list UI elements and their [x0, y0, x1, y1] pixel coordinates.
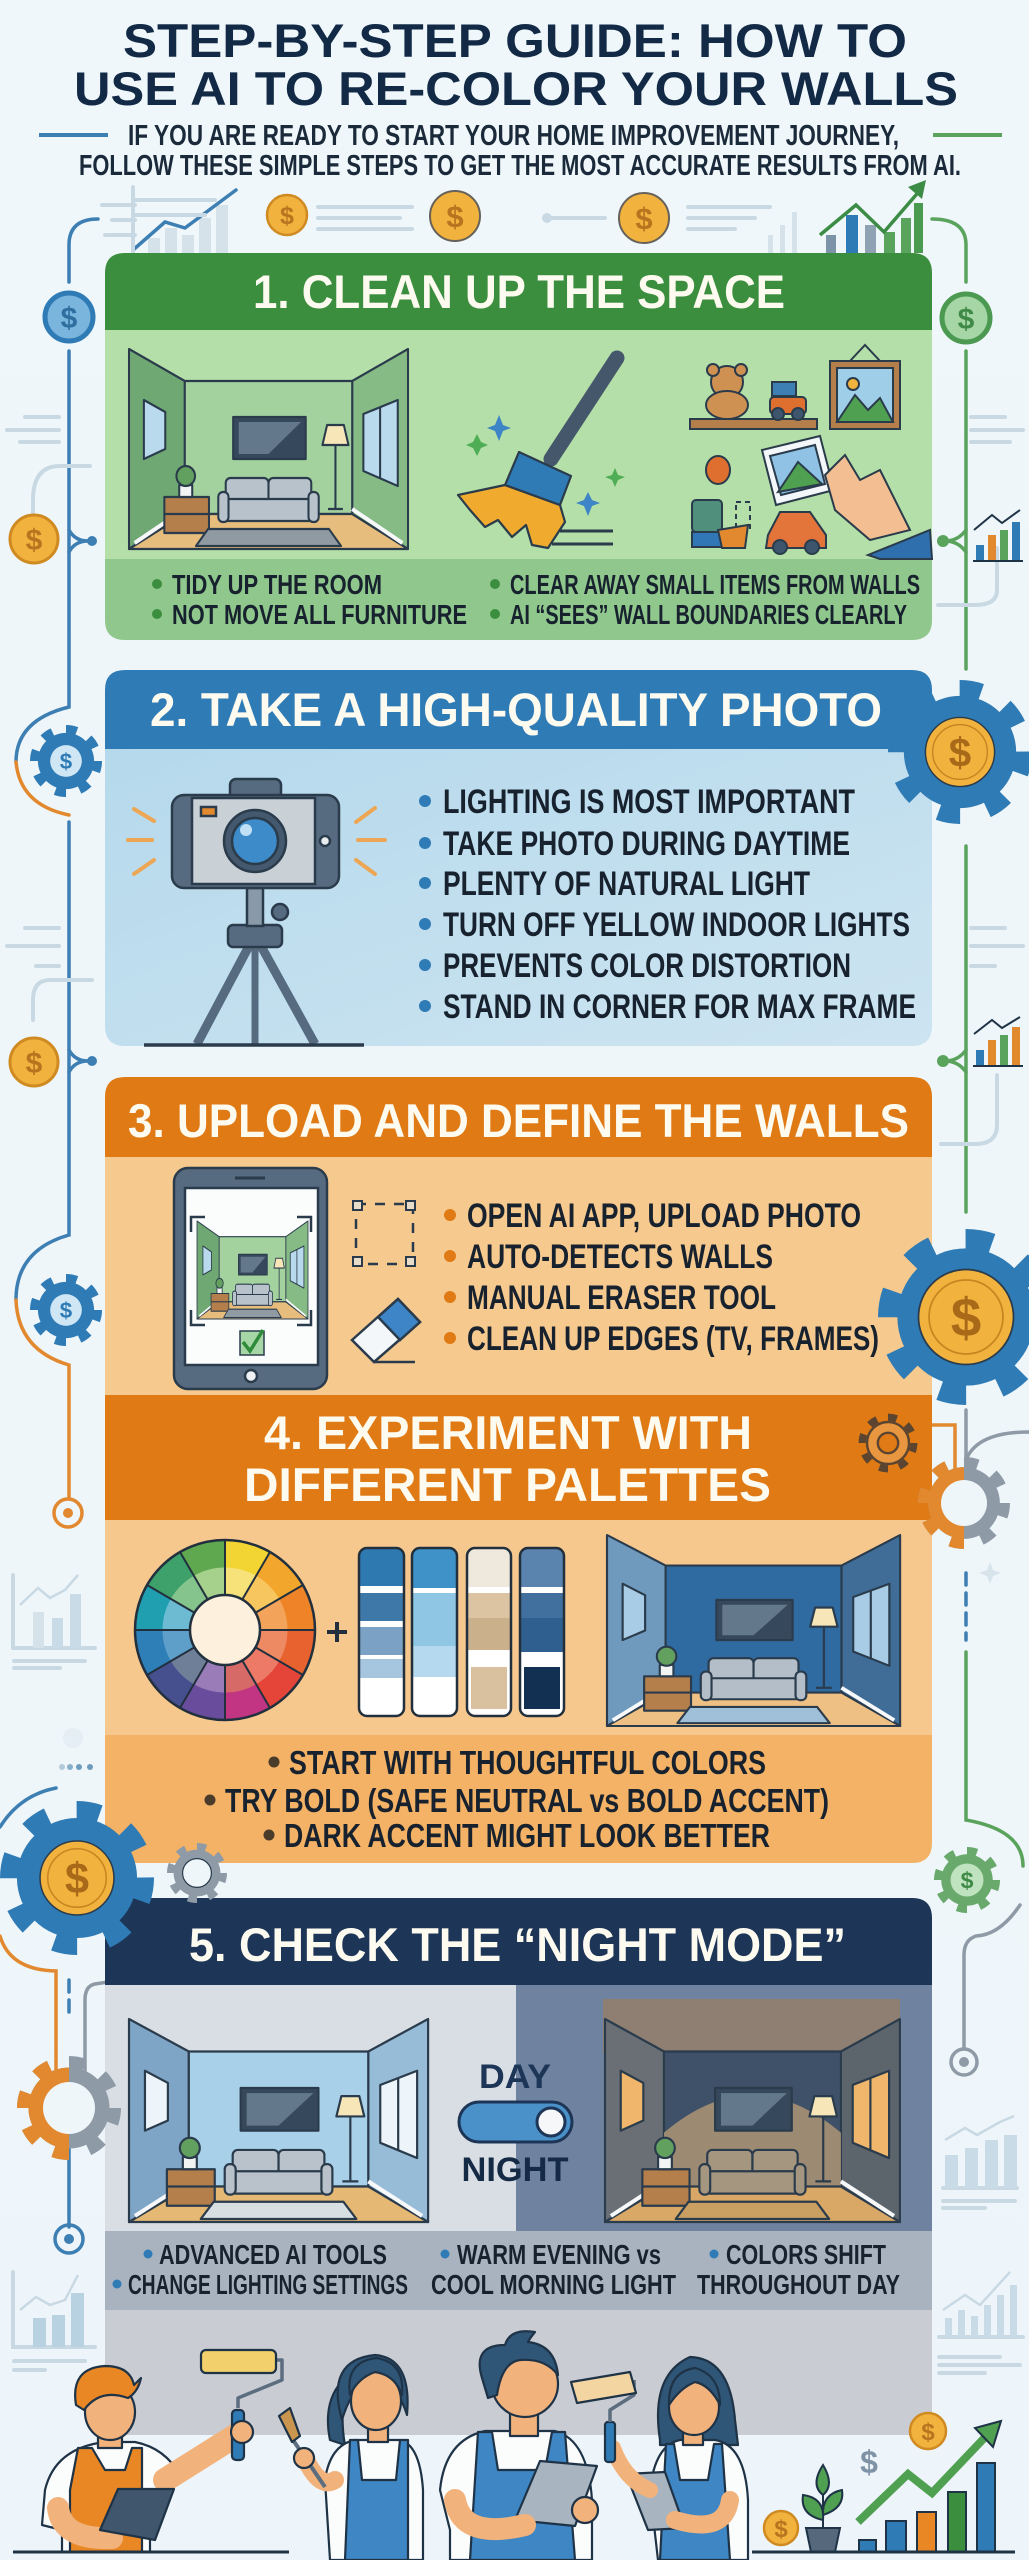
sparkles — [466, 415, 625, 516]
bullet list: TRY BOLD (SAFE NEUTRAL vs BOLD ACCENT) — [225, 1782, 829, 1819]
panel: step 2 take a high-quality photo — [105, 670, 932, 1046]
gear: big blue left with coin: $ — [65, 1855, 89, 1903]
gear: green right: $ — [961, 1867, 974, 1893]
illustration: painter with ponytail — [279, 2355, 423, 2560]
gear: panel 3 right — [890, 1241, 1029, 1393]
title: STEP-BY-STEP GUIDE: HOW TO — [123, 14, 907, 67]
mini chart right 1 — [973, 510, 1023, 561]
illustration: painter with tablet — [440, 2331, 598, 2560]
illustration: plant and growth chart — [13, 2421, 1015, 2552]
gear: step 3 left — [35, 1279, 97, 1341]
toggle: day night: NIGHT — [462, 2151, 569, 2189]
coins row: $ — [446, 199, 464, 234]
heading: 4. EXPERIMENT WITH — [264, 1406, 752, 1459]
coin: left 1 — [10, 515, 58, 563]
gear: green right — [939, 1852, 995, 1908]
heading: 5. CHECK THE “NIGHT MODE” — [189, 1918, 846, 1971]
swatch strips — [359, 1548, 564, 1716]
coin: top of chart: $ — [921, 2419, 935, 2446]
bullet list: THROUGHOUT DAY — [697, 2269, 900, 2300]
coin: blue left: $ — [61, 302, 78, 335]
chart: colour wheel — [121, 1526, 329, 1734]
coin: left 2: $ — [26, 1047, 43, 1080]
illustration: camera on tripod — [144, 779, 364, 1045]
bullet list: PREVENTS COLOR DISTORTION — [443, 947, 851, 985]
heading: DIFFERENT PALETTES — [244, 1458, 771, 1511]
bullet list: AUTO-DETECTS WALLS — [467, 1238, 773, 1276]
bullet list: START WITH THOUGHTFUL COLORS — [289, 1744, 766, 1781]
mini chart right 2 — [973, 1017, 1023, 1066]
illustration: painter with orange hat — [42, 2350, 282, 2552]
icon: small gear — [862, 1417, 914, 1469]
bullet list: NOT MOVE ALL FURNITURE — [172, 599, 467, 630]
bullet list: CLEAN UP EDGES (TV, FRAMES) — [467, 1320, 879, 1358]
illustration: broom — [458, 358, 617, 548]
heading: 3. UPLOAD AND DEFINE THE WALLS — [128, 1094, 909, 1147]
illustration: night room — [603, 1999, 900, 2222]
gear: small grey — [171, 1847, 223, 1899]
bullet list: TAKE PHOTO DURING DAYTIME — [443, 825, 850, 863]
heading — [244, 1406, 771, 1511]
bullet list — [152, 569, 920, 630]
gear: panel 2 right — [898, 690, 1022, 814]
coin: bottom left of chart — [764, 2511, 798, 2545]
icon: plus — [327, 1622, 347, 1642]
illustration: toys and frames — [690, 345, 932, 559]
bullet list: DARK ACCENT MIGHT LOOK BETTER — [284, 1817, 770, 1854]
panel: step 4 experiment with different palettes — [105, 1395, 932, 1863]
bullet list: PLENTY OF NATURAL LIGHT — [443, 865, 810, 903]
bullet list — [419, 783, 916, 1026]
bullet list: COLORS SHIFT — [726, 2239, 886, 2270]
coin: left 2 — [10, 1038, 58, 1086]
icon: selection frame — [353, 1201, 415, 1266]
coins row: $ — [280, 202, 294, 230]
bullet list: TIDY UP THE ROOM — [172, 569, 382, 600]
gear: two-tone right — [924, 1463, 1004, 1543]
icon: eraser — [352, 1299, 420, 1362]
bullet list: LIGHTING IS MOST IMPORTANT — [443, 783, 855, 821]
bullet list: MANUAL ERASER TOOL — [467, 1279, 776, 1317]
coin: blue left — [45, 293, 93, 341]
bullet list — [204, 1744, 829, 1854]
title — [74, 14, 958, 115]
panel: step 5 check the night mode — [105, 1898, 932, 2435]
bullet list: ADVANCED AI TOOLS — [159, 2239, 387, 2270]
title: USE AI TO RE-COLOR YOUR WALLS — [74, 62, 958, 115]
coin: bottom left of chart: $ — [774, 2516, 788, 2543]
panel: step 3 upload and define the walls — [105, 1077, 932, 1395]
coin: green right: $ — [958, 303, 975, 336]
left decorative charts and dots — [13, 1562, 1001, 1770]
coin: green right — [942, 294, 990, 342]
panel: step 1 clean up the space — [105, 253, 932, 640]
toggle: day night — [459, 2058, 572, 2189]
bullet list — [444, 1197, 879, 1358]
bullet list: WARM EVENING vs — [457, 2239, 661, 2270]
coins row — [267, 191, 669, 243]
illustration: tablet with room — [174, 1168, 327, 1389]
illustration: painter with long hair — [571, 2357, 748, 2560]
icon: light rays — [128, 808, 385, 874]
gear: panel 2 right: $ — [949, 729, 971, 775]
icon: dollar sign: $ — [860, 2444, 878, 2480]
gear: step 3 left: $ — [60, 1298, 73, 1323]
gear: panel 3 right: $ — [951, 1287, 981, 1348]
toggle: day night: DAY — [479, 2058, 551, 2096]
gear: step 2 left: $ — [60, 749, 73, 774]
gear: two-tone left — [24, 2063, 114, 2153]
illustration: day room — [129, 2019, 428, 2222]
bullet list: COOL MORNING LIGHT — [431, 2269, 676, 2300]
subtitle — [39, 120, 1002, 182]
heading: 2. TAKE A HIGH-QUALITY PHOTO — [150, 683, 882, 736]
coin: left 1: $ — [26, 524, 43, 557]
illustration: blue room — [607, 1535, 900, 1726]
background charts lower — [13, 2116, 1023, 2373]
heading: 1. CLEAN UP THE SPACE — [253, 265, 785, 318]
illustration: clean green room — [129, 349, 408, 549]
chart: top right growth — [820, 180, 926, 253]
bullet list: OPEN AI APP, UPLOAD PHOTO — [467, 1197, 861, 1235]
coin: top of chart — [910, 2413, 946, 2449]
coins row: $ — [635, 201, 653, 236]
bullet list: CHANGE LIGHTING SETTINGS — [128, 2269, 408, 2300]
gear: big blue left with coin — [11, 1812, 143, 1944]
gear: step 2 left — [35, 730, 97, 792]
bullet list — [112, 2239, 900, 2300]
